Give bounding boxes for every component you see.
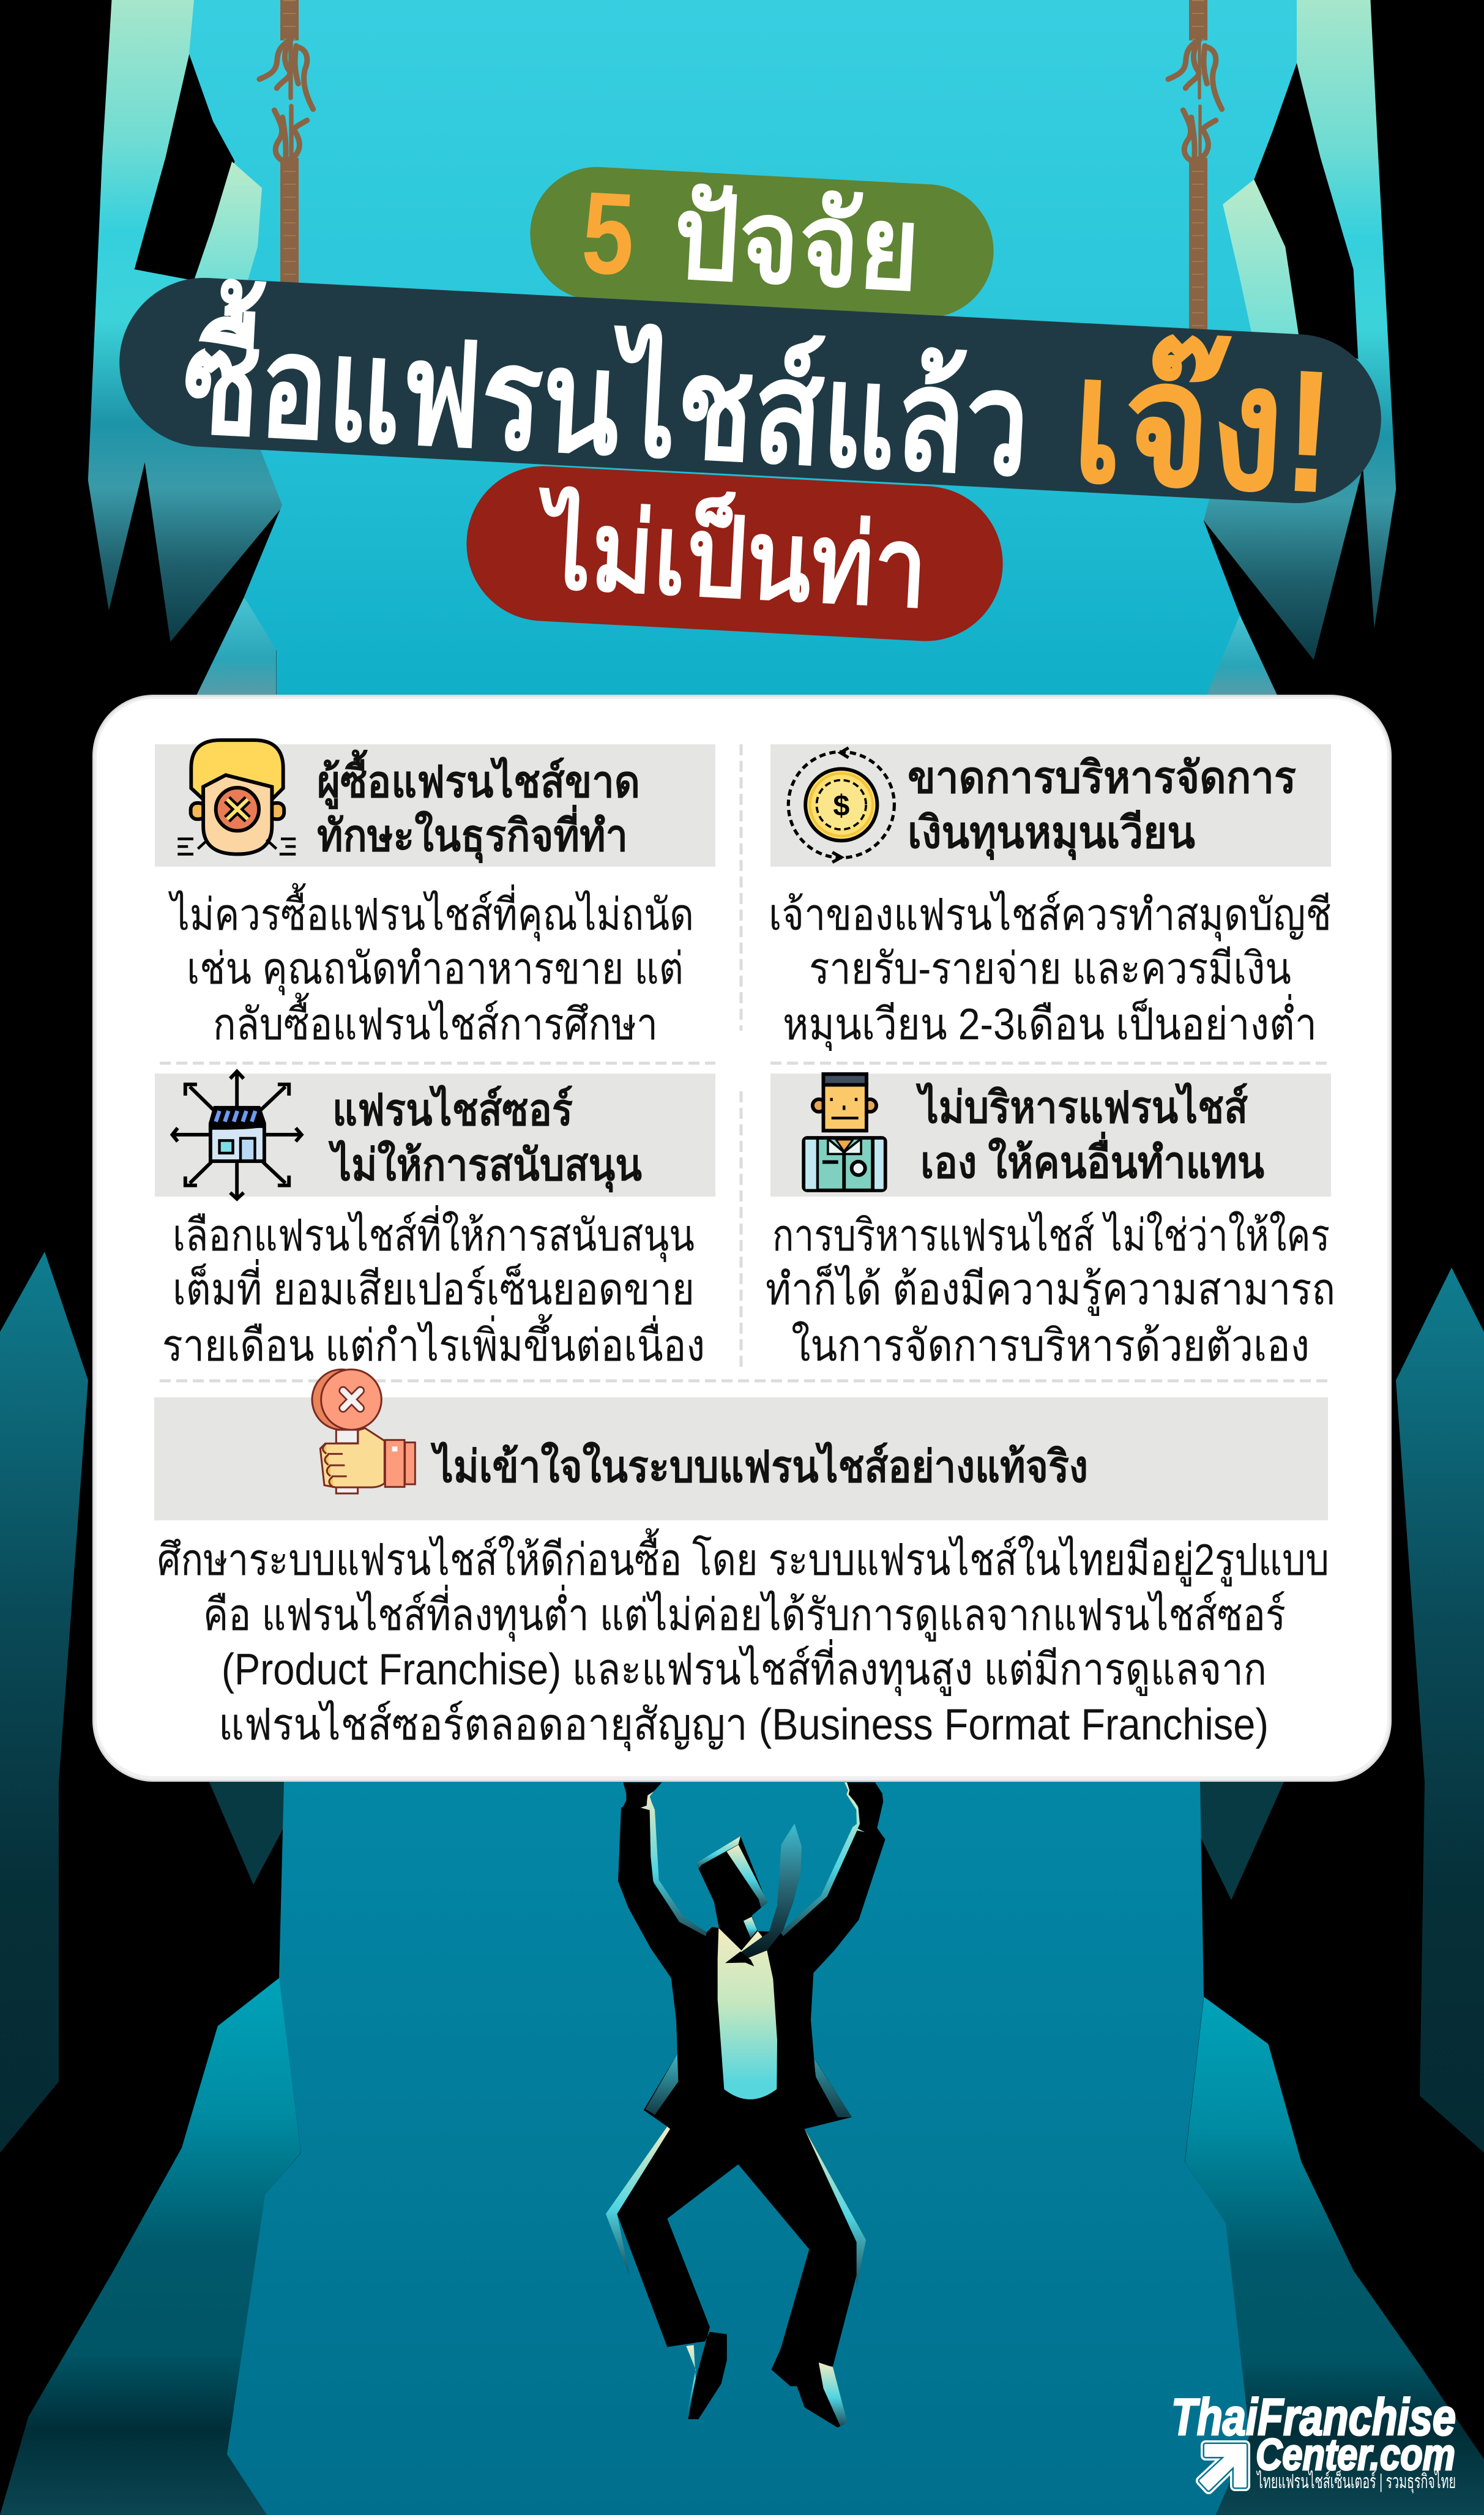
body 3: รายเดือน แต่กำไรเพิ่มขึ้นต่อเนื่อง xyxy=(162,1314,705,1370)
factor 2 block xyxy=(769,744,1332,1051)
cave walls: bottom shards xyxy=(0,1978,1484,2515)
icon: shop with arrows xyxy=(173,1071,302,1199)
body 1 xyxy=(168,883,694,1049)
icon: man in uniform xyxy=(804,1074,886,1190)
factor 1 block xyxy=(155,740,715,1049)
heading 4: เอง ให้คนอื่นทำแทน xyxy=(920,1131,1264,1187)
body 2: เจ้าของแฟรนไชส์ควรทำสมุดบัญชี xyxy=(769,890,1332,941)
cave walls: top shards xyxy=(88,0,1396,700)
body 4: ทำก็ได้ ต้องมีความรู้ความสามารถ xyxy=(766,1263,1335,1316)
heading 5: ไม่เข้าใจในระบบแฟรนไชส์อย่างแท้จริง xyxy=(430,1441,1088,1492)
heading 1: ทักษะในธุรกิจที่ทำ xyxy=(317,804,628,864)
title pill: main headline xyxy=(114,273,1385,533)
headline orange: เจ๊ง! xyxy=(1068,322,1338,530)
body 4: การบริหารแฟรนไชส์ ไม่ใช่ว่าให้ใคร xyxy=(772,1211,1330,1260)
heading 1 xyxy=(317,749,640,864)
heading 4 xyxy=(915,1082,1264,1187)
man hanging from rope xyxy=(606,1782,886,2427)
body 1: เช่น คุณถนัดทำอาหารขาย แต่ xyxy=(187,944,684,995)
logo arrow xyxy=(1201,2445,1245,2489)
factor 4 block xyxy=(766,1074,1335,1370)
icon: coin xyxy=(788,748,894,862)
cave walls: side shards xyxy=(0,1252,1484,2153)
factor 5 block xyxy=(154,1369,1329,1751)
body 3: เต็มที่ ยอมเสียเปอร์เซ็นยอดขาย xyxy=(173,1259,695,1314)
dividers xyxy=(160,744,1329,1381)
body 5: แฟรนไชส์ซอร์ตลอดอายุสัญญา (Business Format Franchise) xyxy=(218,1700,1269,1751)
upper body xyxy=(618,1782,886,2099)
inner shard left xyxy=(194,162,262,280)
number 5: 5 xyxy=(579,168,638,300)
body 1: กลับซื้อแฟรนไชส์การศึกษา xyxy=(213,992,658,1049)
body 2 xyxy=(769,890,1332,1051)
heading 2 xyxy=(908,753,1296,861)
heading 3: แฟรนไชส์ซอร์ xyxy=(332,1084,573,1135)
heading 3: ไม่ให้การสนับสนุน xyxy=(328,1139,642,1193)
word: factors: ปัจจัย xyxy=(671,173,923,315)
heading 1: ผู้ซื้อแฟรนไชส์ขาด xyxy=(317,749,640,810)
body 5: คือ แฟรนไชส์ที่ลงทุนต่ำ แต่ไม่ค่อยได้รับการดูแลจากแฟรนไชส์ซอร์ xyxy=(203,1585,1286,1642)
icon: hand holding cross sign xyxy=(312,1369,415,1493)
subtitle: ไม่เป็นท่า xyxy=(532,481,931,630)
body 1: ไม่ควรซื้อแฟรนไชส์ที่คุณไม่ถนัด xyxy=(168,883,694,941)
heading 3 xyxy=(328,1084,642,1193)
body 3: เลือกแฟรนไชส์ที่ให้การสนับสนุน xyxy=(173,1205,695,1262)
body 4: ในการจัดการบริหารด้วยตัวเอง xyxy=(791,1321,1310,1370)
title pill: not worth it xyxy=(463,462,1007,645)
body 5 xyxy=(157,1528,1329,1751)
title pill: 5 factors xyxy=(527,163,997,321)
lower body xyxy=(606,2037,866,2427)
body 3 xyxy=(162,1205,705,1370)
heading 2: ขาดการบริหารจัดการ xyxy=(908,753,1296,802)
cave opening xyxy=(189,0,1297,2515)
body 4 xyxy=(766,1211,1335,1370)
factor 3 block xyxy=(155,1071,715,1370)
body 2: หมุนเวียน 2-3เดือน เป็นอย่างต่ำ xyxy=(783,994,1317,1051)
info panel xyxy=(92,695,1392,1782)
icon: coin: $ xyxy=(833,789,849,822)
logo xyxy=(1171,2388,1456,2494)
rope left xyxy=(259,0,313,343)
headline white: ซื้อแฟรนไชส์แล้ว xyxy=(179,277,1035,505)
rope right xyxy=(1168,0,1222,343)
heading 2: เงินทุนหมุนเวียน xyxy=(908,809,1195,861)
body 5: (Product Franchise) และแฟรนไชส์ที่ลงทุนสูง แต่มีการดูแลจาก xyxy=(222,1639,1267,1696)
body 2: รายรับ-รายจ่าย และควรมีเงิน xyxy=(809,944,1291,993)
heading 4: ไม่บริหารแฟรนไชส์ xyxy=(915,1082,1248,1132)
icon: confused face xyxy=(177,740,296,854)
